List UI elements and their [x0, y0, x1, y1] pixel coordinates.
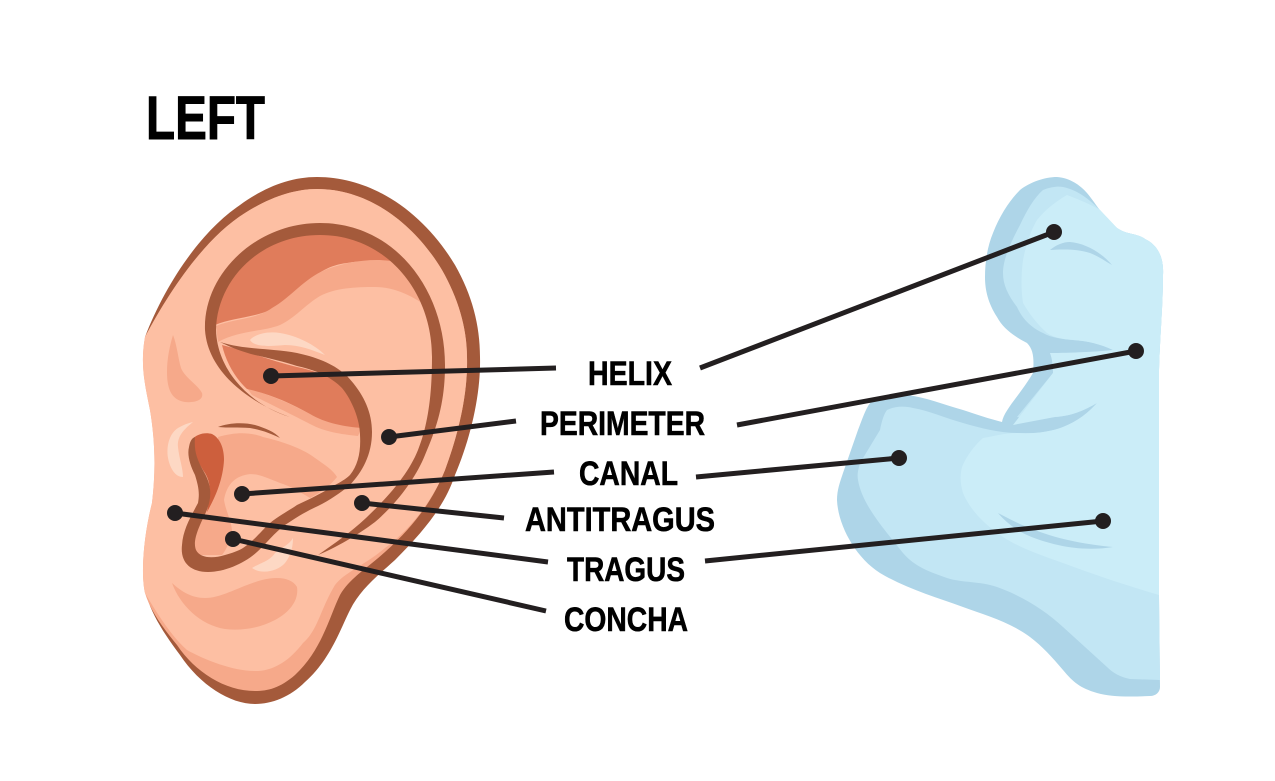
- tragus leader right: [705, 513, 1111, 561]
- title: LEFT: [146, 84, 265, 152]
- perimeter leader left: [381, 421, 516, 445]
- tragus leader left: [167, 505, 548, 562]
- lower scapha mid band: [247, 388, 362, 436]
- left ear fold patch: [167, 335, 202, 402]
- lower highlight: [252, 538, 293, 572]
- leader lines and dots: [167, 224, 1144, 611]
- concha shading: [195, 433, 337, 555]
- label: concha: CONCHA: [564, 601, 688, 639]
- antitragus leader: [354, 495, 504, 518]
- canal leader left: [234, 472, 554, 502]
- left highlight: [167, 422, 193, 477]
- earplug mid tone: [858, 187, 1163, 680]
- lower crescent: [998, 513, 1113, 549]
- top crescent over concha: [218, 423, 280, 438]
- upper crescent: [1050, 242, 1112, 265]
- label: helix: HELIX: [588, 355, 672, 393]
- inner helix: [205, 223, 445, 555]
- label: perimeter: PERIMETER: [540, 405, 705, 443]
- perimeter leader right: [737, 343, 1144, 425]
- earplug dark base: [837, 177, 1163, 697]
- ear shaded skin: [143, 189, 467, 691]
- label: canal: CANAL: [579, 455, 678, 493]
- labels: [525, 355, 715, 639]
- ear main skin: [143, 189, 467, 671]
- concha leader: [225, 531, 546, 611]
- helix leader left: [263, 368, 556, 384]
- label: tragus: TRAGUS: [567, 551, 685, 589]
- illustration: ear: [143, 177, 480, 704]
- earlobe patch: [172, 578, 297, 630]
- earplug light highlight: [961, 195, 1163, 595]
- lower scapha dark: [222, 345, 363, 428]
- canal leader right: [696, 450, 907, 477]
- illustration: earplug: [837, 177, 1163, 697]
- ear outline: [145, 177, 480, 704]
- label: antitragus: ANTITRAGUS: [525, 501, 715, 539]
- upper highlight: [250, 332, 325, 355]
- upper scapha dark: [215, 232, 392, 325]
- antihelix and helix fold: [182, 342, 372, 572]
- upper scapha mid band: [216, 260, 422, 342]
- helix leader right: [700, 224, 1062, 368]
- canal red: [192, 433, 224, 512]
